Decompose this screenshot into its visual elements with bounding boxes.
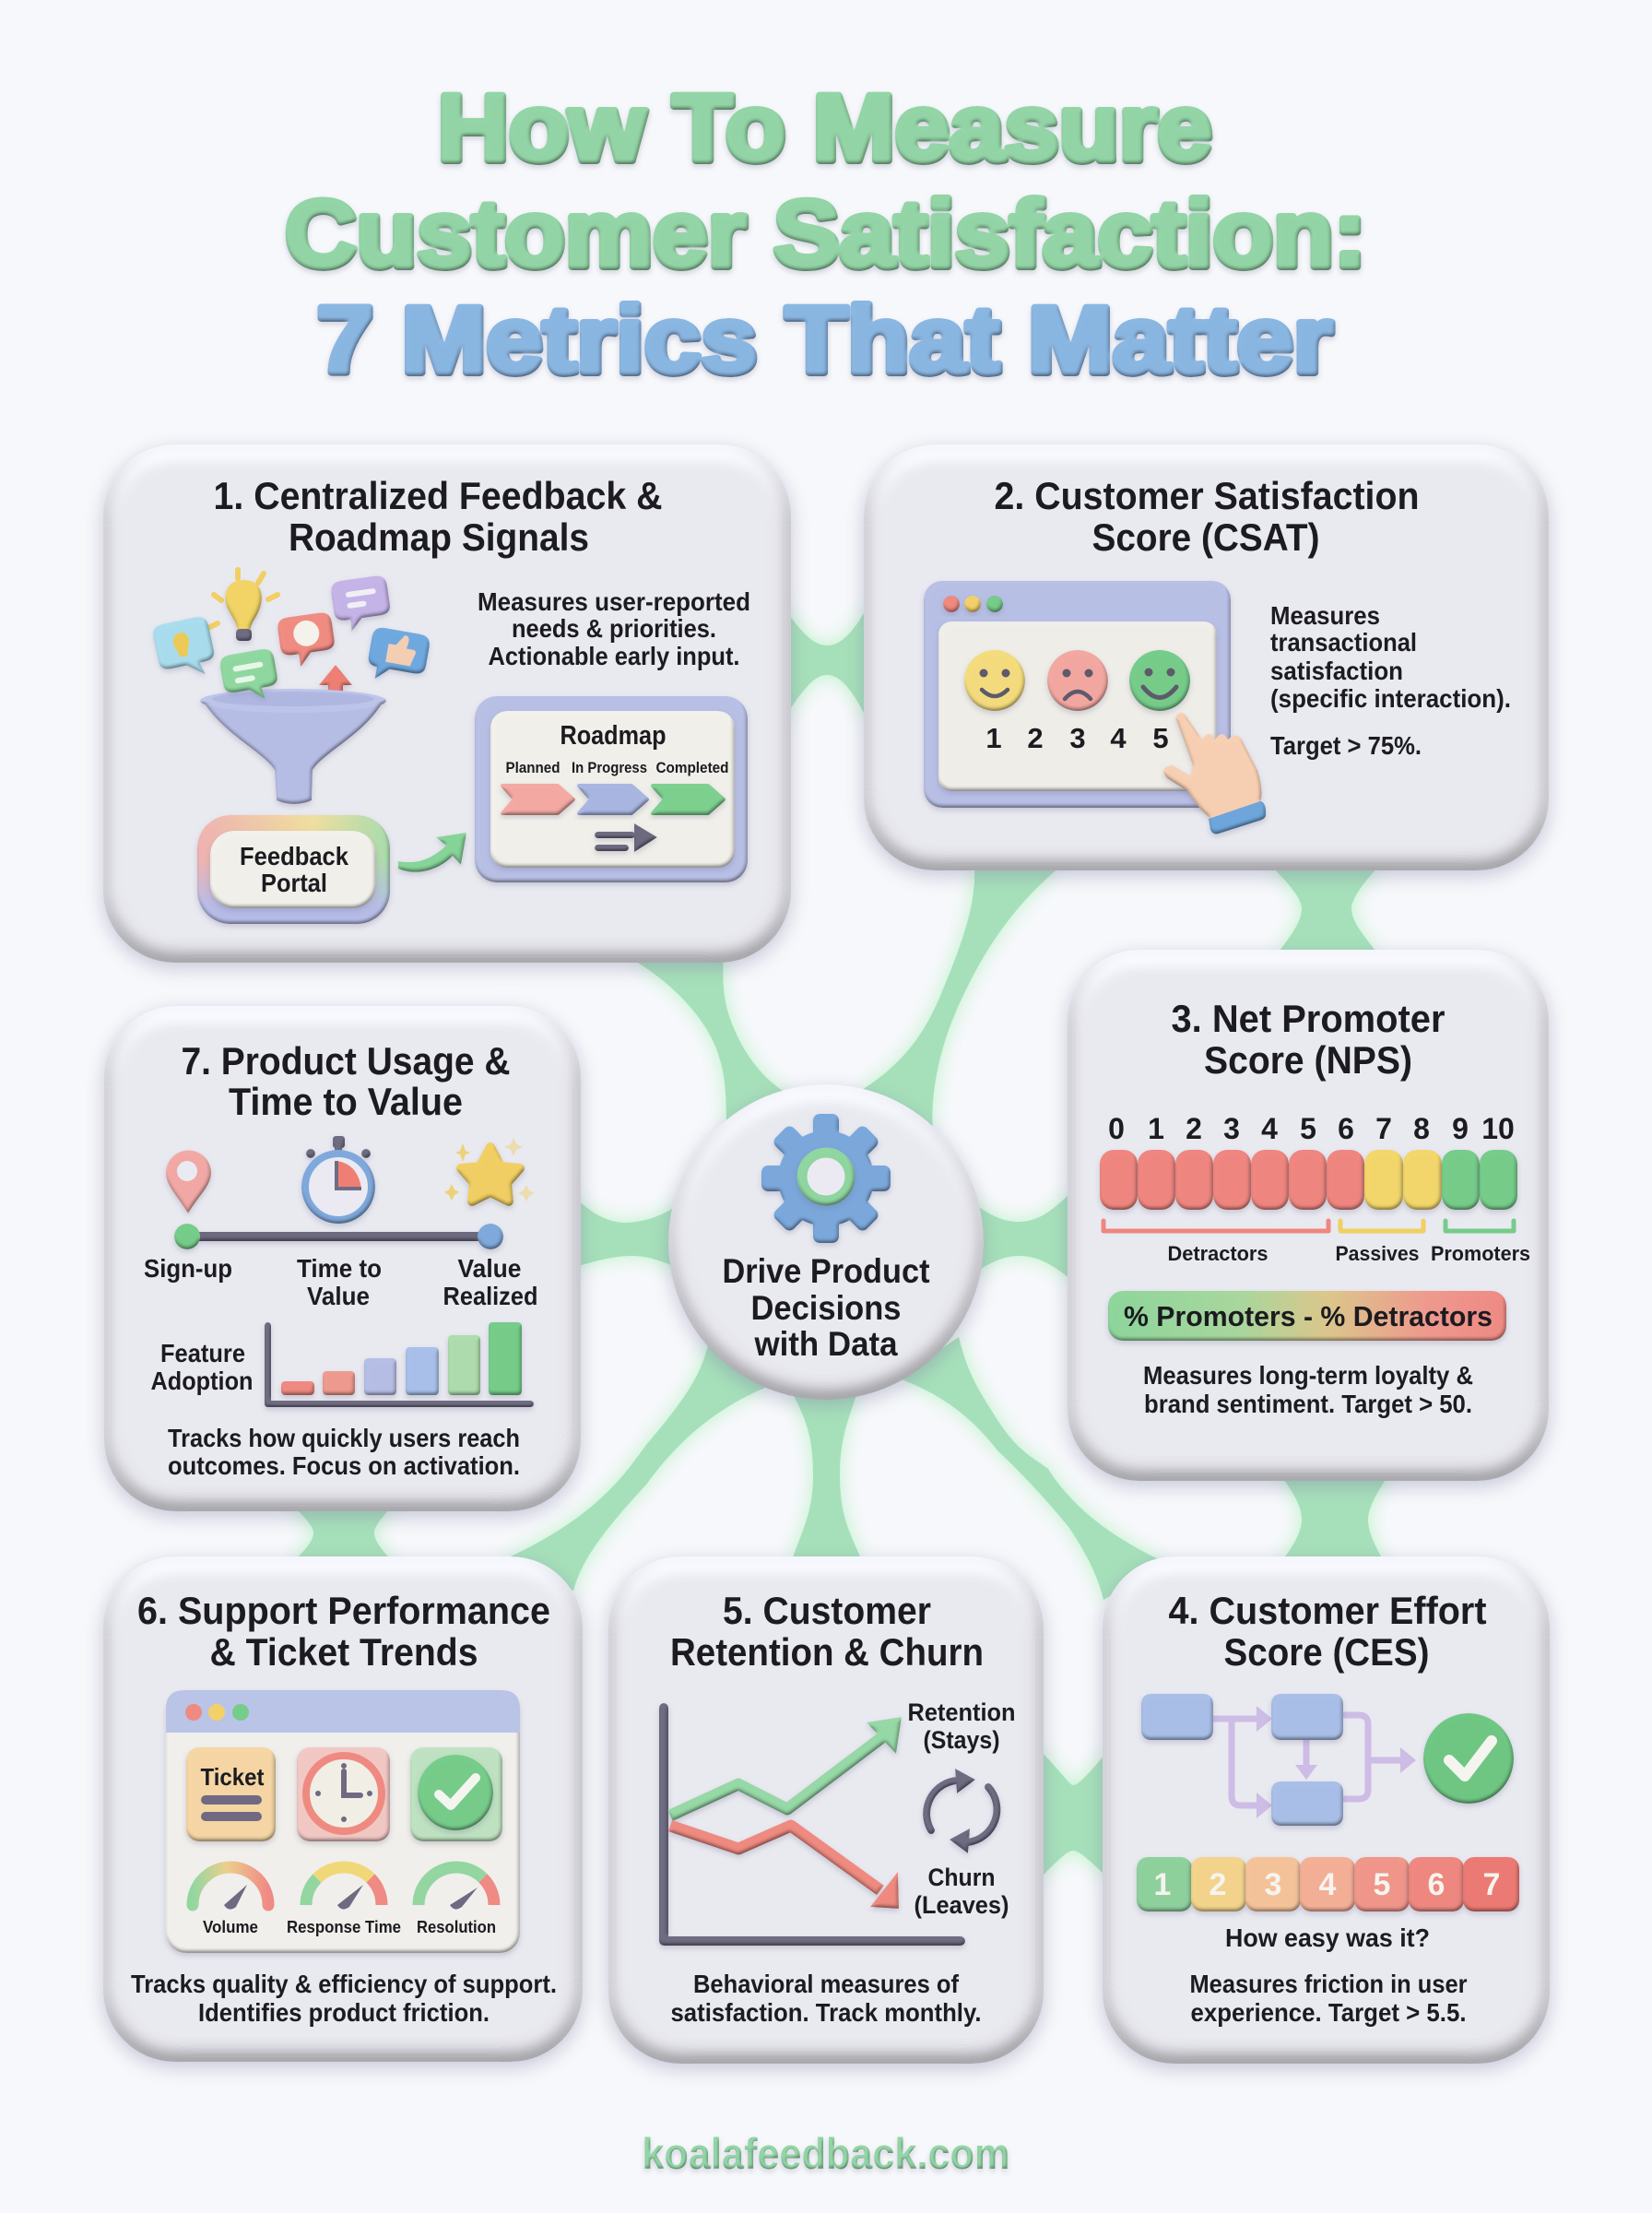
connectors from hub to metric panels xyxy=(286,599,1392,1881)
timeline xyxy=(174,1224,503,1249)
window dots xyxy=(943,596,1003,612)
rating numbers: 2 xyxy=(1027,722,1044,754)
hub label: with Data xyxy=(754,1325,898,1363)
icon: funnel xyxy=(200,689,386,804)
timeline labels: Value xyxy=(307,1282,370,1310)
icon: red up arrow xyxy=(319,665,352,701)
gauge labels xyxy=(203,1918,496,1936)
panel: 2 customer satisfaction score xyxy=(864,444,1549,870)
text: panel 6 description xyxy=(131,1970,557,2027)
effort scale 1 to 7 xyxy=(1137,1857,1519,1911)
text: panel 6 description: Tracks quality & efficiency of support. xyxy=(131,1970,557,1998)
rating numbers: 3 xyxy=(1069,722,1086,754)
nps formula pill xyxy=(1108,1291,1506,1341)
heading: panel 1: 1. Centralized Feedback & xyxy=(214,474,662,517)
hub label: Drive Product xyxy=(723,1252,929,1290)
text: panel 2 description: (specific interaction). xyxy=(1270,684,1511,713)
icon: pointing hand xyxy=(1163,713,1266,834)
rating numbers xyxy=(985,722,1169,754)
feature adoption label: Feature xyxy=(160,1339,245,1367)
effort scale 1 to 7: 2 xyxy=(1210,1867,1226,1902)
feature adoption label: Adoption xyxy=(151,1367,253,1395)
churn label: (Leaves) xyxy=(914,1891,1009,1919)
nps scale numbers: 6 xyxy=(1338,1112,1354,1145)
rating numbers: 5 xyxy=(1152,722,1169,754)
heading: panel 5: Retention & Churn xyxy=(670,1630,984,1674)
retention line xyxy=(670,1717,902,1816)
effort scale 1 to 7: 7 xyxy=(1483,1867,1500,1902)
nps scale numbers: 0 xyxy=(1108,1112,1125,1145)
text: panel 4 description: experience. Target > 5.5. xyxy=(1191,1998,1466,2027)
gauge: response time xyxy=(306,1867,382,1910)
nps scale numbers: 2 xyxy=(1186,1112,1202,1145)
icon: purple bubble xyxy=(330,574,393,633)
central hub xyxy=(668,1084,984,1400)
bar chart: feature adoption xyxy=(265,1322,534,1407)
effort scale 1 to 7: 5 xyxy=(1374,1867,1390,1902)
text: panel 7 description: outcomes. Focus on activation. xyxy=(168,1451,520,1480)
text: panel 1 description: Measures user-reported xyxy=(478,587,750,616)
icon: blue thumbs-up bubble xyxy=(365,626,431,687)
text: panel 2 description: Measures xyxy=(1270,601,1380,630)
text: panel 6 description: Identifies product friction. xyxy=(198,1998,490,2027)
title: Customer Satisfaction: xyxy=(286,182,1366,287)
heading: panel 6: & Ticket Trends xyxy=(210,1630,478,1674)
text: panel 1 description: needs & priorities. xyxy=(512,614,716,643)
arrow: portal to roadmap xyxy=(398,833,466,872)
churn line xyxy=(670,1826,899,1909)
nps formula pill: % Promoters - % Detractors xyxy=(1124,1300,1493,1332)
panel: 4 customer effort score xyxy=(1103,1556,1550,2064)
nps scale numbers: 8 xyxy=(1413,1112,1430,1145)
roadmap board: Planned xyxy=(505,759,560,776)
heading: panel 2: 2. Customer Satisfaction xyxy=(994,474,1420,517)
effort scale 1 to 7: 6 xyxy=(1428,1867,1445,1902)
heading: panel 3 xyxy=(1171,997,1446,1082)
rating numbers: 4 xyxy=(1110,722,1127,754)
heading: panel 2: Score (CSAT) xyxy=(1092,515,1320,559)
timeline labels: Time to xyxy=(297,1254,382,1283)
icon: gear xyxy=(761,1114,891,1243)
face: unhappy red xyxy=(1047,650,1108,711)
tile: ticket: Ticket xyxy=(201,1763,265,1791)
tile: ticket xyxy=(186,1747,276,1841)
churn label: Churn xyxy=(927,1864,996,1891)
heading: panel 3: Score (NPS) xyxy=(1204,1038,1412,1082)
retention label: (Stays) xyxy=(924,1726,999,1754)
text: panel 7 description: Tracks how quickly users reach xyxy=(168,1424,520,1452)
nps scale numbers xyxy=(1108,1112,1515,1145)
text: panel 2 description: satisfaction xyxy=(1270,657,1403,685)
nps group labels: Promoters xyxy=(1431,1242,1530,1265)
gauge: volume xyxy=(193,1867,268,1910)
feedback portal button: Portal xyxy=(261,869,327,897)
churn label xyxy=(914,1864,1009,1919)
title: How To Measure xyxy=(438,76,1212,181)
panel: 1 centralized feedback and roadmap signals xyxy=(103,444,791,963)
text: panel 3 description: Measures long-term loyalty & xyxy=(1143,1361,1473,1390)
gauge labels: Response Time xyxy=(287,1918,401,1936)
icon: location pin xyxy=(166,1151,211,1213)
chevrons: planned, in progress, completed xyxy=(502,786,724,813)
heading: panel 6 xyxy=(137,1589,550,1674)
icon: light blue bubble xyxy=(151,615,218,683)
text: panel 4 description xyxy=(1189,1970,1468,2027)
flow steps xyxy=(1141,1694,1343,1826)
text: panel 2 description: transactional xyxy=(1270,628,1417,657)
heading: panel 7 xyxy=(181,1039,511,1123)
effort scale 1 to 7: 1 xyxy=(1154,1867,1171,1902)
text: panel 5 description xyxy=(671,1970,981,2027)
process flow diagram xyxy=(1141,1694,1514,1826)
text: panel 2 description: Target > 75%. xyxy=(1270,731,1422,760)
retention label: Retention xyxy=(907,1698,1016,1726)
nps scale numbers: 10 xyxy=(1481,1112,1515,1145)
retention label xyxy=(907,1698,1016,1754)
rating numbers: 1 xyxy=(985,722,1002,754)
face: neutral yellow xyxy=(964,650,1025,711)
hub label xyxy=(723,1252,929,1363)
heading: panel 1 xyxy=(214,474,662,559)
timeline labels: Value xyxy=(457,1254,522,1283)
heading: panel 5 xyxy=(670,1589,984,1674)
effort question: How easy was it? xyxy=(1225,1923,1430,1952)
heading: panel 3: 3. Net Promoter xyxy=(1171,997,1446,1040)
effort scale 1 to 7: 4 xyxy=(1319,1867,1337,1902)
nps scale numbers: 3 xyxy=(1223,1112,1240,1145)
text: panel 3 description: brand sentiment. Target > 50. xyxy=(1144,1390,1472,1418)
text: panel 5 description: Behavioral measures of xyxy=(693,1970,960,1998)
title: 7 Metrics That Matter xyxy=(317,288,1333,393)
nps group labels: Passives xyxy=(1335,1242,1420,1265)
icon: red bubble xyxy=(277,611,337,669)
tile: resolved check xyxy=(410,1747,502,1841)
tile: clock xyxy=(297,1747,390,1841)
panel: 3 net promoter score xyxy=(1068,950,1549,1481)
text: panel 4 description: Measures friction in user xyxy=(1189,1970,1468,1998)
line chart: retention vs churn xyxy=(659,1703,965,1946)
feature adoption label xyxy=(151,1339,253,1395)
timeline labels: Realized xyxy=(442,1282,538,1310)
gauge labels: Volume xyxy=(203,1918,258,1936)
text: panel 7 description xyxy=(168,1424,520,1480)
nps scale numbers: 9 xyxy=(1452,1112,1469,1145)
heading: panel 4: Score (CES) xyxy=(1224,1630,1429,1674)
text: panel 1 description: Actionable early input. xyxy=(489,642,739,670)
panel: 5 customer retention and churn xyxy=(608,1556,1044,2064)
icon: stopwatch xyxy=(305,1136,372,1220)
icon: green bubble xyxy=(218,647,281,706)
nps group labels: Detractors xyxy=(1167,1242,1268,1265)
hub label: Decisions xyxy=(750,1289,902,1327)
feedback portal button: Feedback xyxy=(240,842,348,870)
nps group brackets xyxy=(1103,1221,1514,1231)
text: panel 5 description: satisfaction. Track monthly. xyxy=(671,1998,981,2027)
panel: 7 product usage and time to value xyxy=(104,1006,581,1511)
feedback portal button xyxy=(197,815,390,924)
effort scale 1 to 7: 3 xyxy=(1265,1867,1281,1902)
flow arrows xyxy=(1213,1706,1416,1818)
nps group labels xyxy=(1167,1242,1530,1265)
roadmap board: In Progress xyxy=(572,759,647,776)
gauge: resolution xyxy=(419,1867,494,1910)
roadmap board: Completed xyxy=(656,759,728,776)
icon: idea lightbulb xyxy=(210,570,277,641)
nps scale numbers: 7 xyxy=(1375,1112,1392,1145)
heading: panel 7: Time to Value xyxy=(229,1080,463,1123)
text: panel 1 description xyxy=(478,587,750,670)
icon: small gray arrow xyxy=(595,823,657,852)
heading: panel 5: 5. Customer xyxy=(723,1589,931,1632)
gauge labels: Resolution xyxy=(417,1918,496,1936)
heading: panel 2 xyxy=(994,474,1420,559)
icon: star with sparkles xyxy=(444,1138,535,1201)
face: happy green xyxy=(1129,650,1190,711)
survey window xyxy=(924,581,1231,808)
nps scale blocks xyxy=(1100,1150,1517,1210)
title xyxy=(286,76,1366,393)
heading: panel 6: 6. Support Performance xyxy=(137,1589,550,1632)
heading: panel 1: Roadmap Signals xyxy=(289,515,589,559)
timeline labels xyxy=(144,1254,538,1310)
footer url: koalafeedback.com xyxy=(642,2129,1010,2178)
nps scale numbers: 5 xyxy=(1300,1112,1316,1145)
roadmap board xyxy=(475,696,748,882)
nps scale numbers: 1 xyxy=(1148,1112,1164,1145)
heading: panel 4 xyxy=(1169,1589,1487,1674)
text: panel 3 description xyxy=(1143,1361,1473,1418)
text: panel 2 description xyxy=(1270,601,1511,760)
timeline labels: Sign-up xyxy=(144,1254,232,1283)
heading: panel 4: 4. Customer Effort xyxy=(1169,1589,1487,1632)
nps scale numbers: 4 xyxy=(1261,1112,1278,1145)
heading: panel 7: 7. Product Usage & xyxy=(181,1039,511,1083)
support dashboard window xyxy=(166,1690,520,1953)
panel: 6 support performance and ticket trends xyxy=(103,1556,583,2062)
roadmap board: Roadmap xyxy=(560,721,666,751)
icon: cycle arrows xyxy=(926,1769,997,1853)
window dots xyxy=(185,1704,249,1721)
icon: success check xyxy=(1423,1713,1514,1804)
